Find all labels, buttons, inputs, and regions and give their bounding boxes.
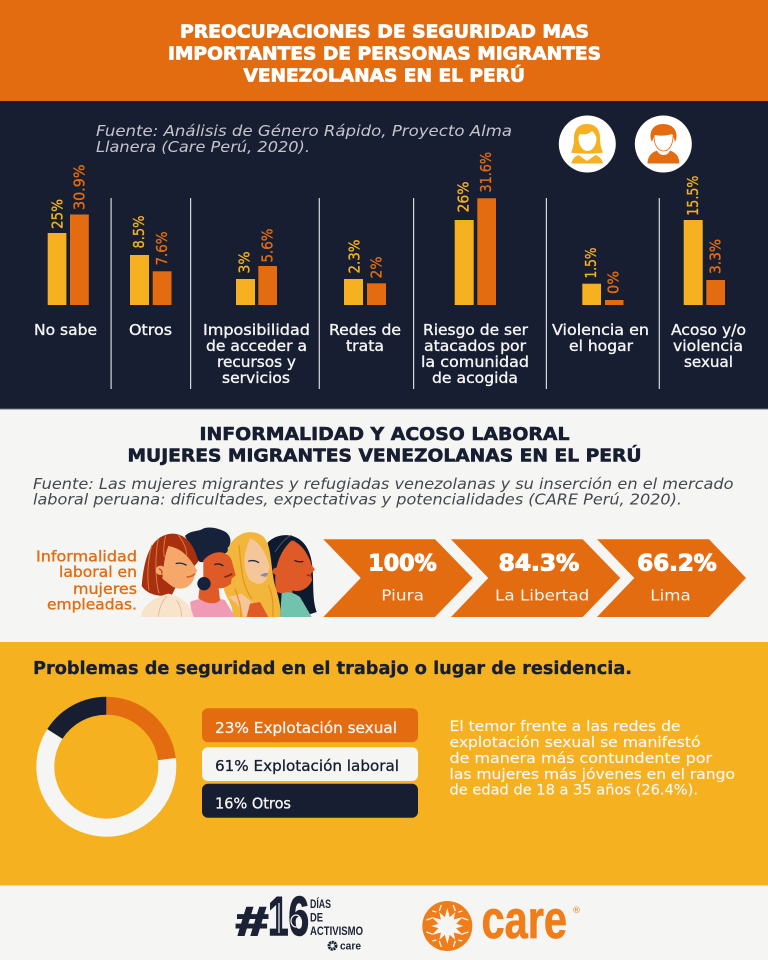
bars: otros (129, 216, 172, 339)
legend: explotación laboral (202, 747, 418, 781)
bars: redes de trata: 2.3% (346, 240, 364, 274)
heading: MUJERES MIGRANTES VENEZOLANAS EN EL PERÚ (128, 444, 642, 466)
arrow: lima: Lima (650, 587, 691, 605)
icon: woman (559, 116, 616, 172)
title: IMPORTANTES DE PERSONAS MIGRANTES (168, 44, 601, 64)
logo: 16 días de activismo: ACTIVISMO (310, 924, 363, 938)
bars: acoso y violencia sexual: 3.3% (706, 239, 724, 274)
logo: care (422, 890, 581, 951)
bars: otros: 8.5% (130, 216, 148, 248)
panel: informality (33, 425, 746, 617)
bars: riesgo de ser atacados: Riesgo de ser (423, 321, 529, 339)
arrow: la libertad: 84.3% (499, 552, 579, 577)
legend: explotación sexual (202, 708, 418, 742)
logo: 16 días de activismo: DE (310, 910, 323, 924)
bars: violencia en el hogar: Violencia en (552, 321, 649, 339)
bars: acoso y violencia sexual (671, 176, 746, 371)
bars: acoso y violencia sexual: Acoso y/o (671, 321, 746, 339)
text: informalidad laboral: mujeres (73, 580, 137, 598)
title (168, 22, 601, 86)
arrow: lima (597, 539, 746, 617)
text: young women finding: explotación sexual se manifestó (450, 735, 701, 751)
heading (128, 425, 642, 466)
bars: acoso y violencia sexual: sexual (684, 353, 733, 371)
arrow: piura (323, 539, 473, 617)
bars: otros: 7.6% (153, 232, 171, 266)
bars: violencia en el hogar (552, 248, 649, 355)
legend: explotación sexual: 23% Explotación sexual (215, 719, 397, 737)
arrow: la libertad: La Libertad (495, 587, 589, 605)
arrow: la libertad (451, 539, 620, 617)
bars: riesgo de ser atacados: la comunidad (421, 353, 529, 371)
source note: Fuente: Análisis de Género Rápido, Proyecto Alma (96, 122, 512, 140)
text: young women finding: las mujeres más jóvenes en el rango (450, 767, 735, 783)
heading: INFORMALIDAD Y ACOSO LABORAL (200, 425, 570, 445)
panel: security concerns chart (0, 101, 768, 410)
bars: acoso y violencia sexual: 15.5% (684, 176, 702, 216)
arrow: lima: 66.2% (637, 552, 717, 577)
text: young women finding: El temor frente a las redes de (450, 719, 681, 735)
logo: care: ® (572, 906, 581, 916)
bars: imposibilidad de acceder: Imposibilidad (203, 321, 310, 339)
source note (96, 122, 512, 156)
logo: 16 días de activismo: DÍAS (310, 896, 331, 911)
donut chart (45, 706, 167, 828)
bars: violencia en el hogar: 1.5% (582, 248, 600, 278)
illustration: four women (141, 527, 317, 617)
text: young women finding: de manera más contundente por (450, 751, 712, 767)
bars: no sabe: 30.9% (70, 164, 88, 210)
bars: violencia en el hogar: 0% (604, 271, 622, 294)
arrow: piura: Piura (381, 587, 424, 605)
bars: riesgo de ser atacados: atacados por (424, 337, 527, 355)
title: PREOCUPACIONES DE SEGURIDAD MAS (180, 22, 589, 42)
arrow: piura: 100% (368, 552, 437, 577)
bars: no sabe: No sabe (34, 321, 97, 339)
text: informalidad laboral: empleadas. (47, 596, 137, 614)
bars: redes de trata: trata (346, 337, 384, 355)
text: informalidad laboral: Informalidad (36, 548, 137, 566)
bars: imposibilidad de acceder: de acceder a (206, 337, 307, 355)
bars: no sabe (34, 164, 97, 339)
legend: otros: 16% Otros (215, 794, 291, 812)
bars: riesgo de ser atacados: 31.6% (477, 152, 495, 192)
source note: Fuente: Las mujeres migrantes y refugiadas venezolanas y su inserción en el mercado (33, 475, 733, 493)
panel: header (0, 0, 768, 101)
logo: 16 días de activismo (236, 885, 363, 952)
bars: no sabe: 25% (48, 199, 66, 229)
legend: explotación laboral: 61% Explotación laboral (215, 757, 399, 775)
bars: riesgo de ser atacados: de acogida (432, 369, 518, 387)
legend: otros (202, 784, 418, 818)
icon: man (635, 116, 692, 172)
text: young women finding: de edad de 18 a 35 años (26.4%). (450, 782, 698, 798)
source note: laboral peruana: dificultades, expectativas y potencialidades (CARE Perú, 2020). (33, 490, 682, 508)
bars: imposibilidad de acceder: recursos y (217, 353, 296, 371)
logo: 16 días de activismo: care (340, 940, 361, 952)
panel: workplace safety problems (0, 642, 768, 886)
text: young women finding (450, 719, 735, 798)
source note (33, 475, 733, 508)
bars: riesgo de ser atacados: 26% (454, 182, 472, 212)
logo: 16 días de activismo: # (236, 900, 268, 944)
bars: imposibilidad de acceder: servicios (222, 369, 290, 387)
bars: riesgo de ser atacados (421, 152, 529, 387)
logo: 16 días de activismo: 16 (268, 885, 309, 947)
title: VENEZOLANAS EN EL PERÚ (244, 64, 525, 86)
bars: imposibilidad de acceder: 3% (236, 252, 254, 274)
source note: Llanera (Care Perú, 2020). (96, 138, 310, 156)
bars: imposibilidad de acceder: 5.6% (258, 228, 276, 262)
text: informalidad laboral (36, 548, 137, 614)
bars: redes de trata: Redes de (329, 321, 401, 339)
bars: imposibilidad de acceder (203, 228, 310, 387)
bars: redes de trata (329, 240, 401, 355)
bars: acoso y violencia sexual: violencia (673, 337, 743, 355)
bars: violencia en el hogar: el hogar (569, 337, 634, 355)
bars: otros: Otros (129, 321, 172, 339)
text: informalidad laboral: laboral en (59, 563, 137, 581)
heading: Problemas de seguridad en el trabajo o lugar de residencia. (33, 658, 632, 679)
logo: care: care (482, 890, 567, 950)
bars: redes de trata: 2% (368, 256, 386, 278)
